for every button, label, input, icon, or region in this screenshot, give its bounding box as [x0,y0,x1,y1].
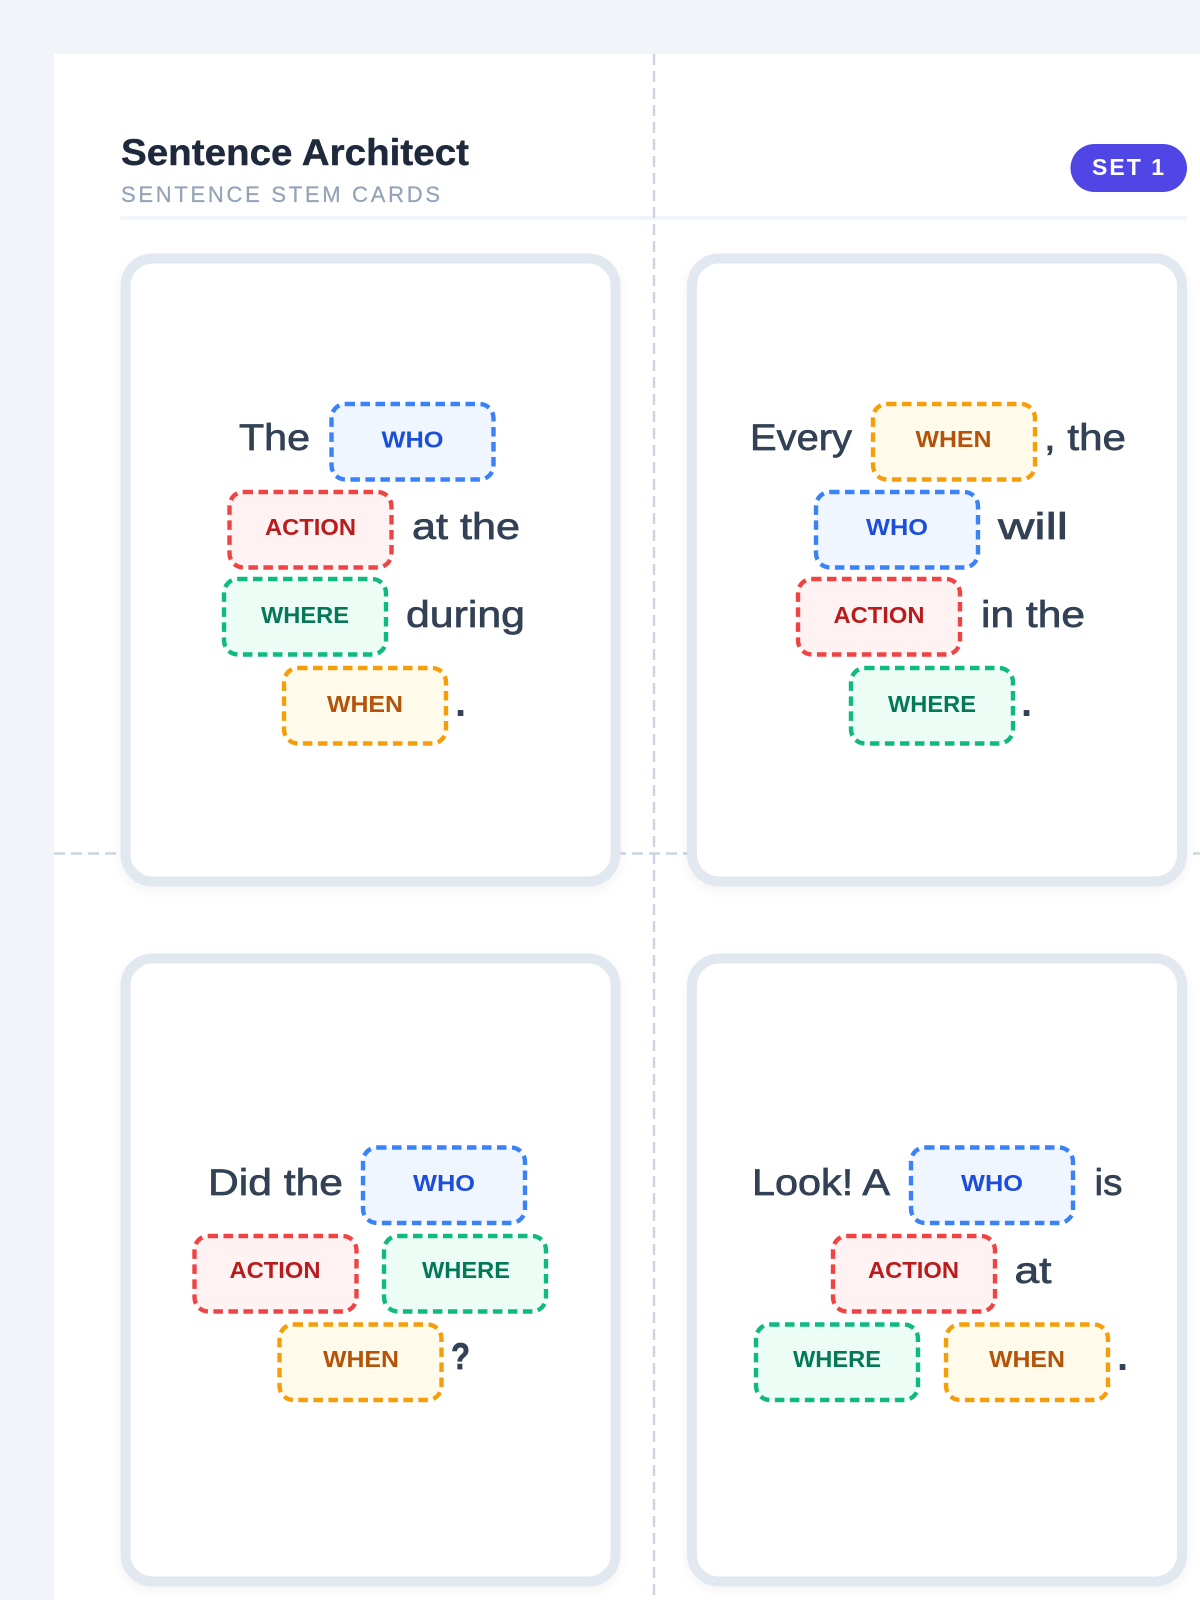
chip: WHO: WHO [382,426,444,452]
punctuation: . [1021,681,1032,725]
chip: ACTION: ACTION [834,602,924,628]
header [121,132,469,207]
chip: WHO: WHO [413,1170,475,1196]
punctuation: . [455,681,466,725]
chip: WHERE [384,1236,546,1312]
chip: WHEN [946,1324,1108,1400]
chip: WHEN [280,1324,442,1400]
word: Every: Every [750,417,853,458]
chip: WHO [911,1148,1073,1223]
chip: WHEN: WHEN [327,691,403,717]
word: at: at [1014,1250,1052,1291]
chip: ACTION [798,579,960,654]
chip: WHEN: WHEN [916,426,992,452]
horizontal cut line [54,852,1200,855]
chip: ACTION [230,492,392,568]
chip: WHERE: WHERE [422,1257,510,1283]
chip: WHEN [284,668,446,744]
badge: set 1: SET 1 [1092,154,1164,180]
chip: WHERE: WHERE [793,1346,881,1372]
word: , the: , the [1044,417,1126,458]
card 4 [692,958,1182,1582]
chip: WHO [363,1148,525,1223]
word: The: The [239,417,310,458]
header divider [120,216,1187,220]
word: at the: at the [412,506,520,547]
chip: WHO: WHO [866,514,928,540]
title: Sentence Architect [121,132,469,173]
chip: WHO [332,404,494,480]
chip: WHEN [873,404,1035,480]
chip: ACTION: ACTION [265,514,356,540]
chip: ACTION [833,1236,995,1312]
chip: WHERE: WHERE [888,691,976,717]
chip: ACTION: ACTION [230,1257,320,1283]
word: will: will [997,506,1068,547]
card 1 [126,258,616,882]
card 2 [692,258,1182,882]
word: during: during [406,594,525,635]
chip: WHERE [851,668,1013,744]
chip: WHEN: WHEN [989,1346,1065,1372]
card 3 [126,958,616,1582]
chip: WHO [816,492,978,568]
chip: WHERE [224,579,386,654]
chip: WHEN: WHEN [323,1346,399,1372]
word: Did the: Did the [208,1162,343,1203]
word: Look! A: Look! A [752,1162,890,1203]
chip: WHERE [756,1324,918,1400]
punctuation: ? [451,1336,470,1377]
chip: WHO: WHO [961,1170,1023,1196]
word: is: is [1094,1162,1122,1203]
vertical cut line [653,54,655,1600]
badge: set 1 [1070,144,1187,192]
subtitle: SENTENCE STEM CARDS [121,182,440,207]
word: in the: in the [981,594,1085,635]
chip: ACTION [194,1236,356,1312]
punctuation: . [1117,1335,1128,1379]
chip: WHERE: WHERE [261,602,349,628]
chip: ACTION: ACTION [868,1257,959,1283]
